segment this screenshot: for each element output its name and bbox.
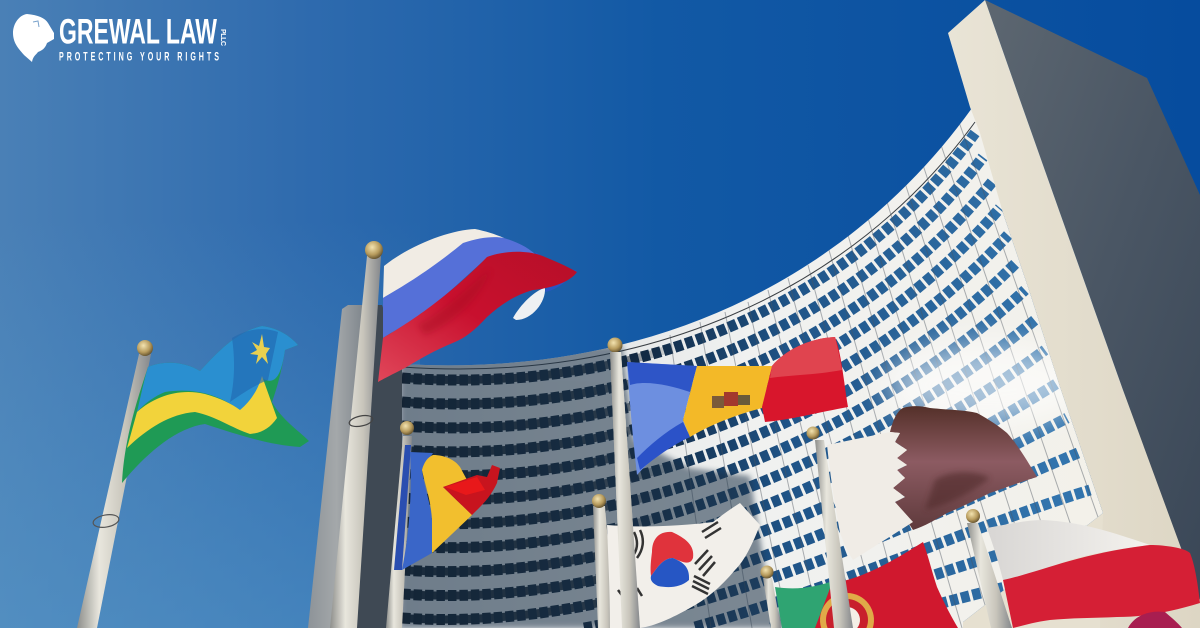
suffix: PLLC xyxy=(219,29,226,46)
icon: lion head xyxy=(13,14,54,62)
flagpole: Russia xyxy=(330,241,383,628)
ground wall below facade xyxy=(963,513,1200,628)
wordmark: GREWAL LAW xyxy=(59,12,217,52)
trigrams xyxy=(618,522,721,598)
flagpole: Rwanda xyxy=(77,340,153,628)
flag: Rwanda xyxy=(122,326,309,483)
flag: Russia xyxy=(378,229,577,382)
flagpole: Moldova xyxy=(608,338,640,628)
flag: Moldova xyxy=(627,337,848,475)
left tower end of building xyxy=(308,305,404,628)
curved building facade with window rows xyxy=(400,100,1137,628)
flag: South Korea xyxy=(607,503,760,628)
logo: Grewal Law xyxy=(13,12,226,64)
flag: Qatar xyxy=(827,406,1037,560)
flagpole: Portugal xyxy=(760,566,781,628)
tower end wall: cream edge xyxy=(948,0,1200,628)
flagpole: Qatar xyxy=(806,426,853,628)
taegeuk blue xyxy=(651,558,689,587)
emblem on Moldova flag xyxy=(712,392,750,408)
finial: South Korea pole xyxy=(592,494,606,508)
sun emblem xyxy=(250,334,270,364)
flag: Romania xyxy=(402,452,500,570)
pole in front of Korean flag xyxy=(610,352,640,628)
flagpole: Romania xyxy=(386,421,414,628)
taegeuk red xyxy=(651,532,693,576)
tagline: PROTECTING YOUR RIGHTS xyxy=(59,51,219,64)
flag: Poland xyxy=(987,520,1200,628)
flag: Portugal xyxy=(775,542,958,628)
flagpole: Poland xyxy=(966,509,1012,628)
emblem on Portuguese flag xyxy=(820,593,874,628)
flag: partial magenta flag xyxy=(1128,612,1182,628)
flagpole: South Korea xyxy=(593,506,615,628)
tower end wall: shaded side xyxy=(985,0,1200,610)
